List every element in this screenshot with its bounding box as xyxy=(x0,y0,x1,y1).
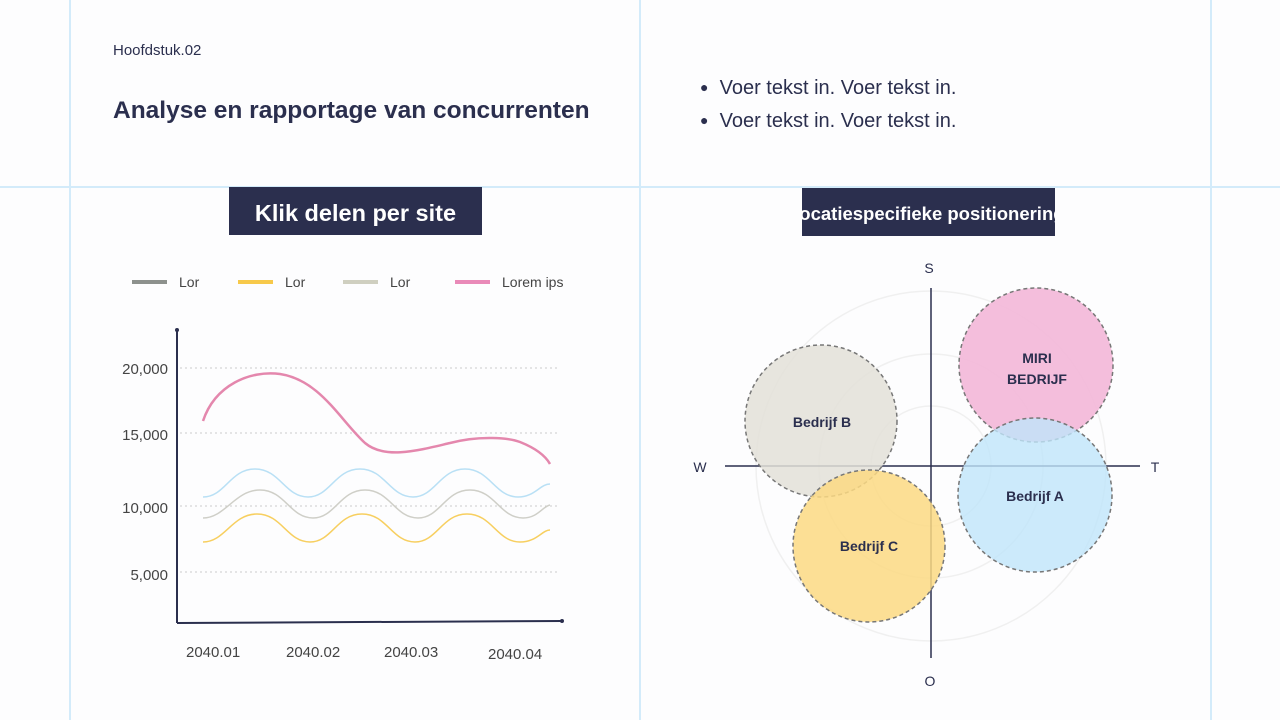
circle: MIRI: BEDRIJF xyxy=(1007,371,1067,387)
heading: location positioning xyxy=(802,188,1055,236)
y axis labels: 15,000 xyxy=(122,427,168,444)
positioning map: O xyxy=(925,673,936,689)
chapter label: Hoofdstuk.02 xyxy=(113,42,201,59)
positioning map: S xyxy=(924,260,934,276)
circle: MIRI: MIRI xyxy=(1022,350,1052,366)
legend: Lor xyxy=(285,274,306,290)
positioning map: T xyxy=(1151,459,1160,475)
circle: Bedrijf C: Bedrijf C xyxy=(840,538,898,554)
bullet list xyxy=(700,77,956,132)
heading: click share xyxy=(229,187,482,235)
x axis labels: 2040.01 xyxy=(186,644,240,661)
circle: Bedrijf B: Bedrijf B xyxy=(793,414,851,430)
positioning map: W xyxy=(693,459,707,475)
circle: Bedrijf B xyxy=(745,345,897,497)
y axis labels: 10,000 xyxy=(122,500,168,517)
circle: MIRI xyxy=(959,288,1113,442)
line chart xyxy=(122,274,564,663)
legend: Lor xyxy=(390,274,411,290)
title: Analyse en rapportage van concurrenten xyxy=(113,97,590,124)
circle: Bedrijf C xyxy=(793,470,945,622)
heading: click share: Klik delen per site xyxy=(255,200,456,226)
legend xyxy=(132,274,563,290)
x axis labels: 2040.04 xyxy=(488,646,542,663)
y axis labels: 5,000 xyxy=(130,567,168,584)
bullet list: ● Voer tekst in. Voer tekst in. xyxy=(700,110,956,132)
positioning map xyxy=(693,260,1160,689)
y axis labels xyxy=(122,361,168,584)
legend: Lor xyxy=(179,274,200,290)
y axis labels: 20,000 xyxy=(122,361,168,378)
circle: Bedrijf A xyxy=(958,418,1112,572)
circle: Bedrijf A: Bedrijf A xyxy=(1006,488,1064,504)
x axis labels: 2040.02 xyxy=(286,644,340,661)
x axis labels: 2040.03 xyxy=(384,644,438,661)
legend: Lorem ips xyxy=(502,274,563,290)
x axis labels xyxy=(186,644,542,663)
bullet list: ● Voer tekst in. Voer tekst in. xyxy=(700,77,956,99)
